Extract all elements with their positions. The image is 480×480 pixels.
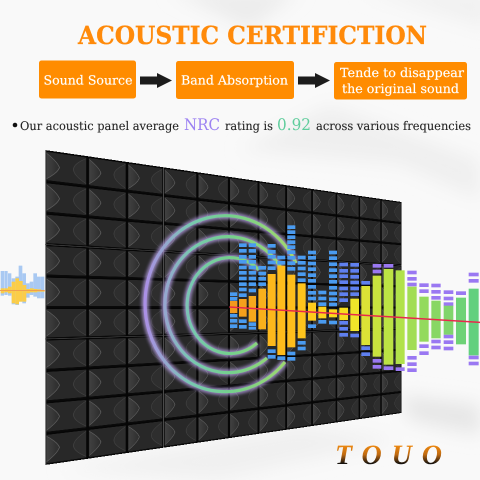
equalizer bars xyxy=(229,225,480,372)
blue level segments xyxy=(230,225,337,361)
box: sound source xyxy=(39,60,136,98)
box: tends to disappear: Tende to disappear xyxy=(340,65,464,80)
NRC statement line: 0.92 xyxy=(277,115,311,134)
NRC statement line: NRC xyxy=(184,115,220,134)
indigo level segments xyxy=(339,263,370,356)
brand logo: TOUO xyxy=(335,440,442,471)
arrow 2 xyxy=(298,73,330,88)
small incoming waveform xyxy=(0,266,45,305)
NRC statement line: across various frequencies xyxy=(316,119,471,133)
box: sound source: Sound Source xyxy=(44,72,132,88)
acoustic panel wall xyxy=(45,150,402,465)
arrow 1 xyxy=(140,73,172,88)
box: tends to disappear: the original sound xyxy=(342,81,459,96)
box: band absorption: Band Absorption xyxy=(181,72,288,88)
NRC statement line xyxy=(13,115,471,134)
sound rings xyxy=(145,216,296,392)
title: ACOUSTIC CERTIFICTION xyxy=(77,21,427,50)
purple level segments xyxy=(373,264,479,372)
NRC statement line: Our acoustic panel average xyxy=(20,119,179,133)
red center line xyxy=(229,307,480,322)
box: tends to disappear xyxy=(334,62,467,100)
NRC statement line: rating is xyxy=(225,119,273,133)
box: band absorption xyxy=(176,61,294,99)
main amplitude bars xyxy=(230,266,479,365)
